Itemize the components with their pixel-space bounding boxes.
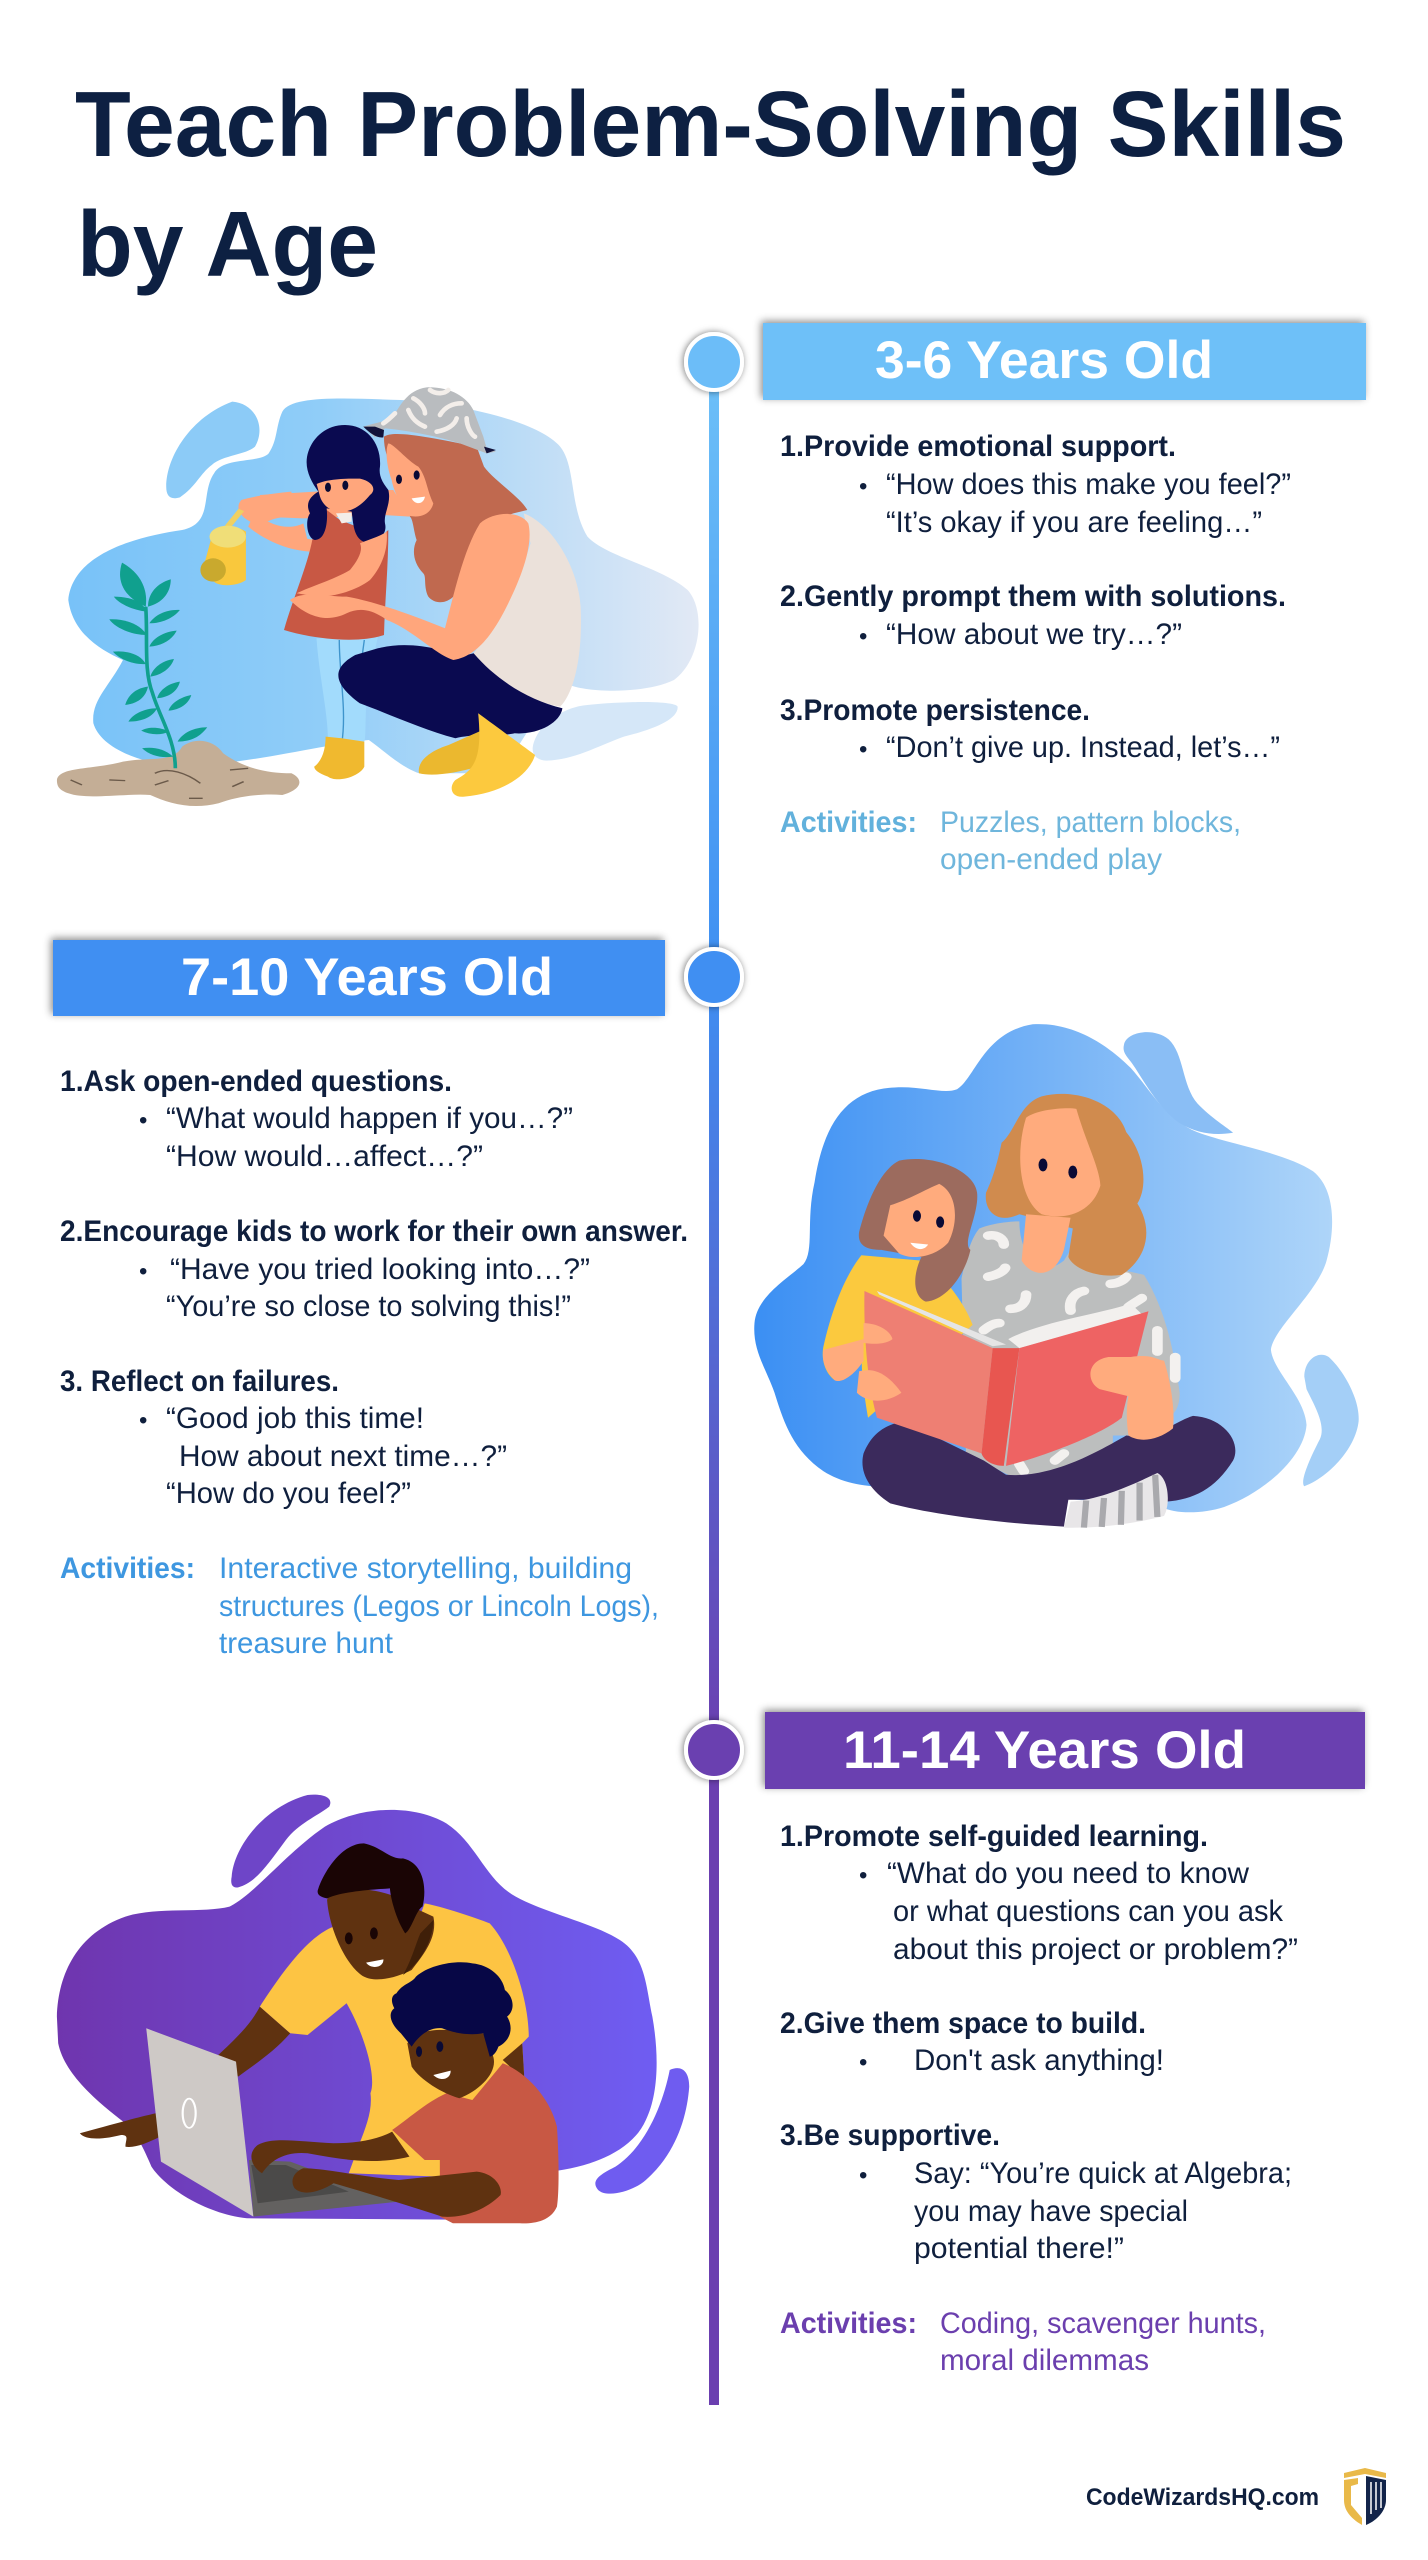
man's head	[327, 1889, 434, 1979]
book cover	[864, 1291, 993, 1453]
panel: 11-14 years tips: 3.Be supportive.	[780, 2119, 1000, 2152]
panel: 3-6 years tips: “Don’t give up. Instead, let’s…”	[886, 731, 1280, 764]
panel: 7-10 years header	[53, 940, 665, 1016]
panel: 3-6 years tips: •	[859, 473, 867, 500]
panel: 3-6 years tips	[780, 430, 1291, 764]
panel: 3-6 years tips: 2.Gently prompt them with solutions.	[780, 580, 1286, 613]
panel: 7-10 years tips: 3. Reflect on failures.	[60, 1365, 339, 1398]
timeline node: 7-10 years	[686, 949, 742, 1005]
panel: 7-10 years activities	[60, 1552, 659, 1660]
girl's shirt	[823, 1255, 973, 1418]
illustration: mother and daughter watering a plant	[57, 387, 699, 806]
panel: 11-14 years tips: you may have special	[914, 2195, 1188, 2228]
panel: 11-14 years tips: •	[859, 1862, 867, 1889]
man's arm and hand	[216, 2007, 290, 2077]
child's hair	[307, 425, 389, 542]
book pages	[877, 1291, 1006, 1346]
panel: 3-6 years tips: 1.Provide emotional support.	[780, 430, 1176, 463]
boy's head	[407, 2030, 494, 2098]
panel: 11-14 years activities	[780, 2307, 1266, 2377]
panel: 3-6 years activities: Puzzles, pattern blocks,	[940, 806, 1241, 839]
footer: brand name: CodeWizardsHQ.com	[1086, 2484, 1319, 2511]
laptop	[249, 2160, 399, 2217]
child's front arm	[297, 532, 387, 597]
panel: 11-14 years tips: “What do you need to know	[887, 1857, 1249, 1890]
panel: 7-10 years header: 7-10 Years Old	[181, 948, 553, 1007]
boy's arms	[251, 2132, 409, 2173]
panel: 7-10 years activities: Activities:	[60, 1552, 195, 1585]
girl's hair	[859, 1159, 977, 1302]
panel: 11-14 years tips: 1.Promote self-guided learning.	[780, 1820, 1208, 1853]
panel: 11-14 years header	[765, 1712, 1365, 1789]
panel: 11-14 years tips: or what questions can you ask	[893, 1895, 1284, 1928]
timeline line	[709, 358, 719, 2405]
panel: 7-10 years tips	[60, 1065, 688, 1510]
panel: 11-14 years activities: Activities:	[780, 2307, 917, 2340]
panel: 7-10 years tips: 1.Ask open-ended questions.	[60, 1065, 452, 1098]
timeline node: 3-6 years	[686, 334, 742, 390]
child's dress	[284, 510, 388, 640]
ground mound	[57, 741, 299, 806]
child's far arm	[260, 517, 310, 550]
panel: 3-6 years activities	[780, 806, 1241, 876]
child legs	[317, 637, 378, 742]
title	[75, 72, 1346, 296]
child boots	[314, 737, 364, 779]
mother's tank top	[474, 513, 581, 707]
boy's shirt	[392, 2063, 559, 2223]
panel: 11-14 years tips: •	[859, 2162, 867, 2189]
panel: 11-14 years tips: potential there!”	[914, 2232, 1124, 2265]
panel: 11-14 years tips: •	[859, 2049, 867, 2076]
girl's face	[884, 1184, 955, 1257]
title: Teach Problem-Solving Skills	[75, 72, 1346, 176]
mother's jeans	[338, 645, 562, 738]
panel: 7-10 years activities: treasure hunt	[219, 1627, 394, 1660]
panel: 11-14 years tips: about this project or problem?”	[893, 1933, 1298, 1966]
mother's hair	[986, 1094, 1146, 1276]
girl's arm	[823, 1339, 864, 1381]
panel: 3-6 years activities: Activities:	[780, 806, 917, 839]
title: by Age	[77, 192, 378, 296]
panel: 7-10 years tips: 2.Encourage kids to work for their own answer.	[60, 1215, 688, 1248]
hands	[1090, 1356, 1174, 1440]
panel: 11-14 years tips: Don't ask anything!	[914, 2044, 1164, 2077]
panel: 7-10 years tips: How about next time…?”	[179, 1440, 507, 1473]
panel: 11-14 years tips: Say: “You’re quick at Algebra;	[914, 2157, 1292, 2190]
child's face	[317, 479, 373, 512]
mother's hair	[384, 434, 527, 602]
panel: 7-10 years tips: “What would happen if you…?”	[166, 1102, 573, 1135]
watering can	[228, 510, 241, 527]
panel: 3-6 years header: 3-6 Years Old	[875, 331, 1213, 390]
child's hand and arm	[248, 517, 314, 552]
panel: 7-10 years tips: “You’re so close to solving this!”	[166, 1290, 571, 1323]
panel: 7-10 years tips: •	[139, 1258, 147, 1285]
striped sock	[1064, 1473, 1168, 1528]
panel: 11-14 years header: 11-14 Years Old	[843, 1721, 1246, 1780]
mother's back arm, right part	[260, 490, 410, 518]
panel: 3-6 years activities: open-ended play	[940, 843, 1162, 876]
icon: shield logo	[1344, 2468, 1386, 2525]
panel: 7-10 years tips: •	[139, 1107, 147, 1134]
mother's face	[387, 443, 433, 516]
mother's front arm	[290, 514, 530, 660]
hat	[363, 387, 496, 453]
mother's back arm, left part	[238, 492, 291, 525]
plant	[109, 563, 207, 768]
panel: 3-6 years tips: •	[859, 623, 867, 650]
panel: 11-14 years activities: Coding, scavenger hunts,	[940, 2307, 1266, 2340]
man's shirt	[260, 1903, 529, 2177]
crossed legs	[862, 1416, 1235, 1527]
collar	[336, 513, 352, 523]
mother's boots	[419, 730, 483, 775]
mother's neck and face	[1022, 1214, 1071, 1273]
panel: 11-14 years tips	[780, 1820, 1298, 2265]
panel: 7-10 years tips: “Have you tried looking into…?”	[170, 1253, 590, 1286]
panel: 3-6 years tips: “It’s okay if you are feeling…”	[886, 506, 1262, 539]
panel: 7-10 years tips: •	[139, 1407, 147, 1434]
panel: 7-10 years tips: “How do you feel?”	[166, 1477, 411, 1510]
panel: 3-6 years tips: “How does this make you feel?”	[886, 468, 1291, 501]
mother's shirt	[962, 1221, 1180, 1478]
panel: 7-10 years tips: “Good job this time!	[166, 1402, 424, 1435]
panel: 3-6 years tips: •	[859, 736, 867, 763]
panel: 7-10 years tips: “How would…affect…?”	[166, 1140, 483, 1173]
illustration: mother and daughter reading a book	[754, 1024, 1359, 1528]
panel: 7-10 years activities: Interactive storytelling, building	[219, 1552, 632, 1585]
panel: 3-6 years header	[763, 323, 1366, 400]
panel: 3-6 years tips: “How about we try…?”	[886, 618, 1182, 651]
panel: 11-14 years activities: moral dilemmas	[940, 2344, 1149, 2377]
panel: 11-14 years tips: 2.Give them space to build.	[780, 2007, 1146, 2040]
panel: 7-10 years activities: structures (Legos or Lincoln Logs),	[219, 1590, 659, 1623]
panel: 3-6 years tips: 3.Promote persistence.	[780, 694, 1090, 727]
illustration: father and son at a laptop	[57, 1795, 689, 2223]
timeline node: 11-14 years	[686, 1722, 742, 1778]
man's torso filler	[503, 2043, 524, 2080]
